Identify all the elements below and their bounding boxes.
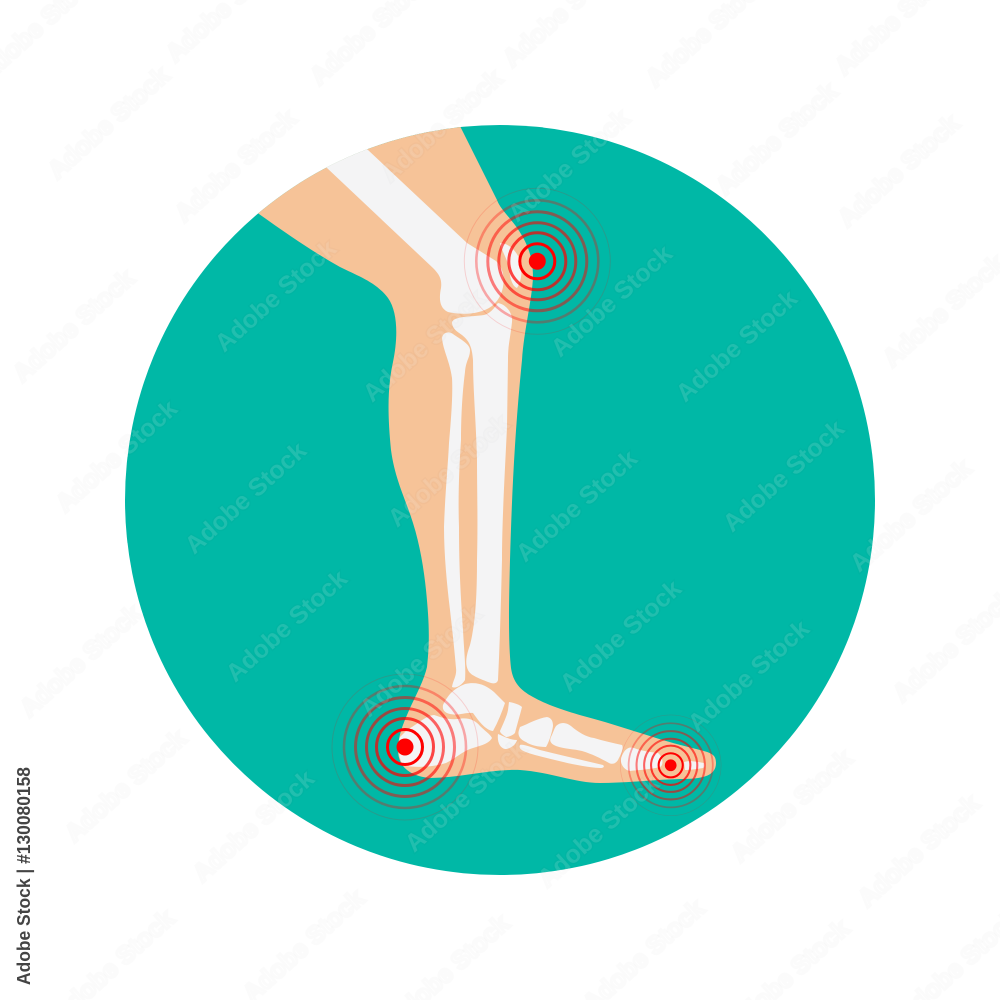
stock watermarks: Adobe Stock [845, 454, 977, 578]
stock watermarks: Adobe Stock [8, 264, 140, 388]
leg skin silhouette [240, 120, 716, 783]
calcaneus bone [399, 715, 492, 767]
stock watermarks: Adobe Stock [180, 436, 312, 560]
stock watermarks: Adobe Stock [43, 61, 175, 185]
stock watermarks: Adobe Stock [711, 77, 843, 201]
navicular bone [500, 702, 522, 737]
stock watermarks: Adobe Stock [358, 284, 490, 408]
leg illustration [240, 120, 716, 783]
talus bone [443, 683, 505, 731]
stock watermarks: Adobe Stock [51, 394, 183, 518]
stock watermarks: Adobe Stock [683, 614, 815, 738]
stock watermarks: Adobe Stock [221, 564, 353, 688]
stock watermarks: Adobe Stock [60, 724, 192, 848]
stock watermarks: Adobe Stock [511, 444, 643, 568]
stock watermarks: Adobe Stock [15, 599, 147, 723]
stock watermarks: Adobe Stock [546, 239, 678, 363]
fibula bone [442, 332, 470, 688]
cuneiform bone [518, 717, 553, 747]
stock watermarks: Adobe Stock [400, 734, 532, 858]
stock watermarks: Adobe Stock [853, 789, 985, 913]
stock watermarks: Adobe Stock [671, 284, 803, 408]
thin metatarsal bone [519, 745, 604, 768]
tibia bone [452, 303, 512, 683]
metatarsal bone [550, 723, 623, 764]
toe phalanx bone [621, 747, 662, 771]
cuboid bone [498, 734, 517, 749]
teal background circle [125, 125, 875, 875]
stock watermarks: Adobe Stock [210, 234, 342, 358]
stock watermarks: Adobe Stock [355, 599, 487, 723]
pain rings: toe [620, 715, 721, 816]
distal phalanx bone [684, 761, 705, 770]
stock watermarks: Adobe Stock [188, 764, 320, 888]
pain rings: heel [332, 674, 478, 820]
stock watermarks: Adobe Stock [533, 769, 665, 893]
stock watermarks: Adobe Stock [503, 104, 635, 228]
stock watermarks: Adobe Stock [726, 744, 858, 868]
stock watermarks: Adobe Stock [833, 109, 965, 233]
stock watermarks: Adobe Stock [555, 574, 687, 698]
pain rings: knee [464, 188, 610, 334]
stock watermarks: Adobe Stock [718, 414, 850, 538]
stock watermarks: Adobe Stock [383, 409, 515, 533]
femur bone [326, 150, 504, 314]
patella bone [500, 243, 521, 288]
stock watermarks: Adobe Stock [376, 64, 508, 188]
stock id label: Adobe Stock | #130080158 [14, 767, 34, 985]
stock watermarks: Adobe Stock [170, 104, 302, 228]
